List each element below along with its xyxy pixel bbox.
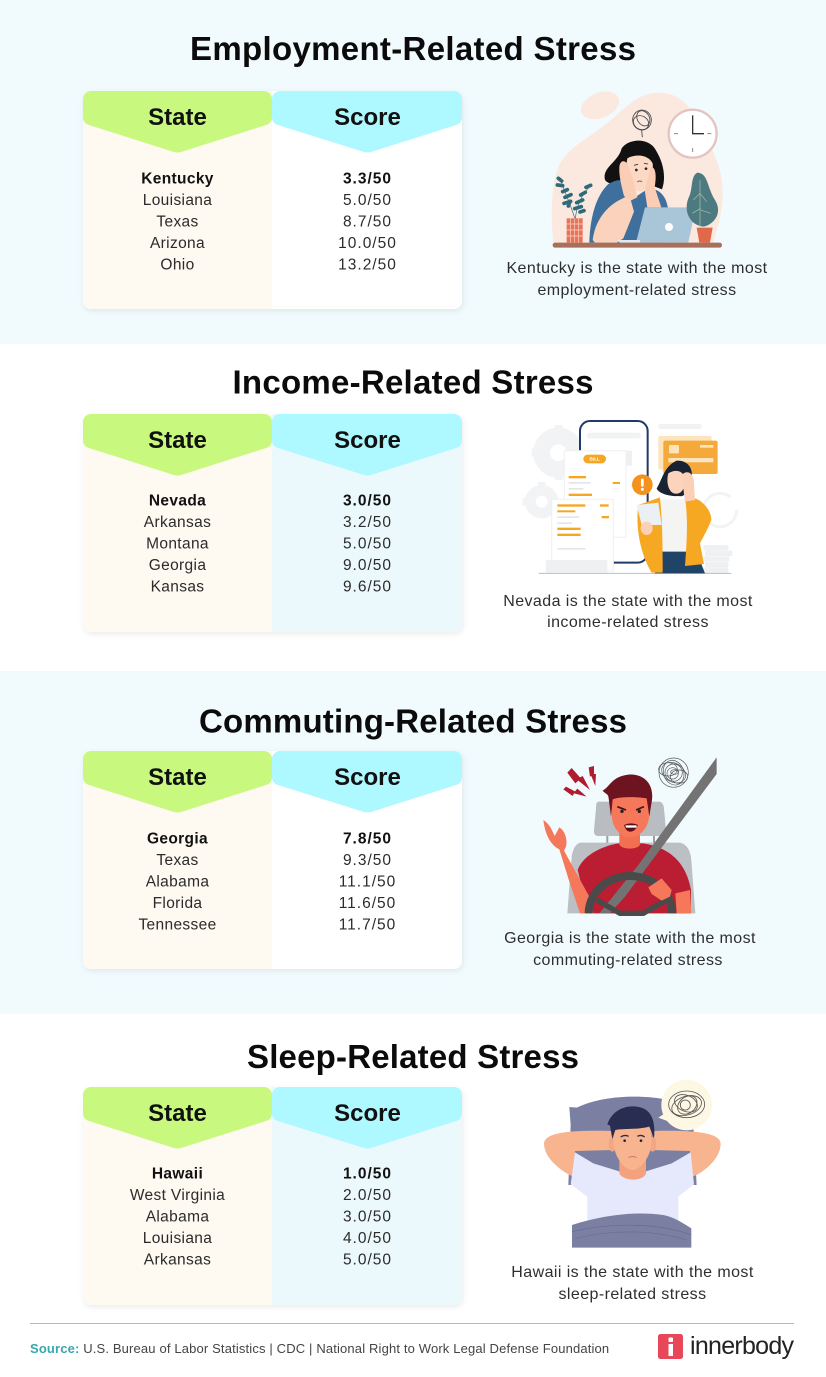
caption: income: Nevada is the state with the most — [503, 593, 753, 610]
table: commuting: State — [148, 764, 207, 791]
table: employment: Louisiana — [143, 192, 212, 209]
table: sleep: Hawaii — [152, 1166, 203, 1182]
panel: employment-related stress — [83, 30, 768, 309]
table: sleep: 1.0/50 — [343, 1166, 392, 1182]
table: sleep — [83, 1087, 462, 1305]
table: sleep: West Virginia — [130, 1187, 225, 1204]
caption: sleep: sleep-related stress — [558, 1286, 707, 1303]
table: income: 9.0/50 — [343, 557, 392, 574]
heading: sleep: Sleep-Related Stress — [247, 1038, 579, 1075]
table: income — [83, 414, 462, 632]
table: sleep: State — [148, 1100, 207, 1127]
panel: income-related stress — [83, 364, 753, 632]
table: commuting: 9.3/50 — [343, 852, 392, 869]
table: commuting — [83, 751, 462, 969]
table: commuting: 11.1/50 — [339, 874, 396, 890]
table: employment: 8.7/50 — [343, 214, 392, 230]
table: sleep: Arkansas — [144, 1252, 211, 1268]
illustration: angry driver — [543, 757, 717, 913]
table: employment: 3.3/50 — [343, 170, 392, 188]
panel: sleep-related stress — [83, 1038, 754, 1305]
table: income: State — [148, 427, 207, 454]
table: employment: State — [148, 104, 207, 131]
heading: employment: Employment-Related Stress — [190, 30, 636, 67]
source line: Source: U.S. Bureau of Labor Statistics | CDC | National Right to Work Legal Defense Foundation — [30, 1341, 609, 1356]
table: income: Georgia — [149, 557, 206, 574]
table: commuting: Score — [334, 764, 401, 791]
caption: commuting: Georgia is the state with the most — [504, 930, 756, 947]
caption: income: income-related stress — [547, 614, 709, 631]
illustration: man awake in bed — [544, 1080, 721, 1248]
table: commuting: 7.8/50 — [343, 830, 392, 848]
table: income: 3.0/50 — [343, 492, 392, 510]
illustration: woman with bills: BILL — [589, 457, 600, 462]
table: income: Kansas — [151, 578, 204, 596]
table: employment: Score — [334, 104, 401, 131]
caption: employment: employment-related stress — [537, 282, 737, 299]
table: income: Score — [334, 427, 401, 454]
table: commuting: Tennessee — [138, 916, 217, 934]
table: commuting: Texas — [156, 852, 199, 869]
table: employment: 10.0/50 — [338, 235, 397, 252]
heading: commuting: Commuting-Related Stress — [199, 702, 627, 740]
logo: innerbody: innerbody — [690, 1332, 794, 1360]
caption: commuting: commuting-related stress — [533, 952, 723, 969]
table: commuting: Georgia — [147, 830, 208, 848]
table: sleep: 2.0/50 — [343, 1187, 392, 1204]
panel: commuting-related stress — [83, 702, 756, 969]
table: income: 3.2/50 — [343, 514, 392, 531]
table: commuting: Alabama — [146, 874, 209, 890]
table: income: Montana — [146, 536, 209, 552]
table: income: 5.0/50 — [343, 536, 392, 552]
table: sleep: 5.0/50 — [343, 1252, 392, 1268]
table: sleep: 3.0/50 — [343, 1208, 392, 1226]
caption: income — [503, 593, 753, 631]
caption: employment: Kentucky is the state with the most — [506, 260, 768, 277]
table: sleep: Louisiana — [143, 1230, 212, 1247]
table: commuting: 11.6/50 — [339, 895, 396, 912]
table: sleep: Score — [334, 1100, 401, 1127]
table: employment: Kentucky — [141, 170, 214, 188]
table: sleep: Alabama — [146, 1208, 209, 1226]
table: employment: Arizona — [150, 235, 205, 252]
table: commuting: Florida — [153, 895, 202, 912]
table: employment: 13.2/50 — [338, 256, 397, 274]
table: employment: Ohio — [160, 256, 195, 274]
table: sleep: 4.0/50 — [343, 1230, 392, 1247]
table: income: Nevada — [149, 492, 206, 510]
caption: sleep — [511, 1264, 754, 1303]
caption: commuting — [504, 930, 756, 969]
caption: sleep: Hawaii is the state with the most — [511, 1264, 754, 1281]
table: employment — [83, 91, 462, 309]
heading: income: Income-Related Stress — [232, 364, 594, 400]
table: employment: Texas — [156, 214, 199, 230]
table: income: Arkansas — [144, 514, 211, 531]
table: income: 9.6/50 — [343, 578, 392, 596]
caption: employment — [506, 260, 768, 299]
illustration: woman with bills — [523, 421, 737, 573]
table: commuting: 11.7/50 — [339, 916, 396, 934]
table: employment: 5.0/50 — [343, 192, 392, 209]
illustration: stressed woman at laptop — [552, 86, 723, 248]
